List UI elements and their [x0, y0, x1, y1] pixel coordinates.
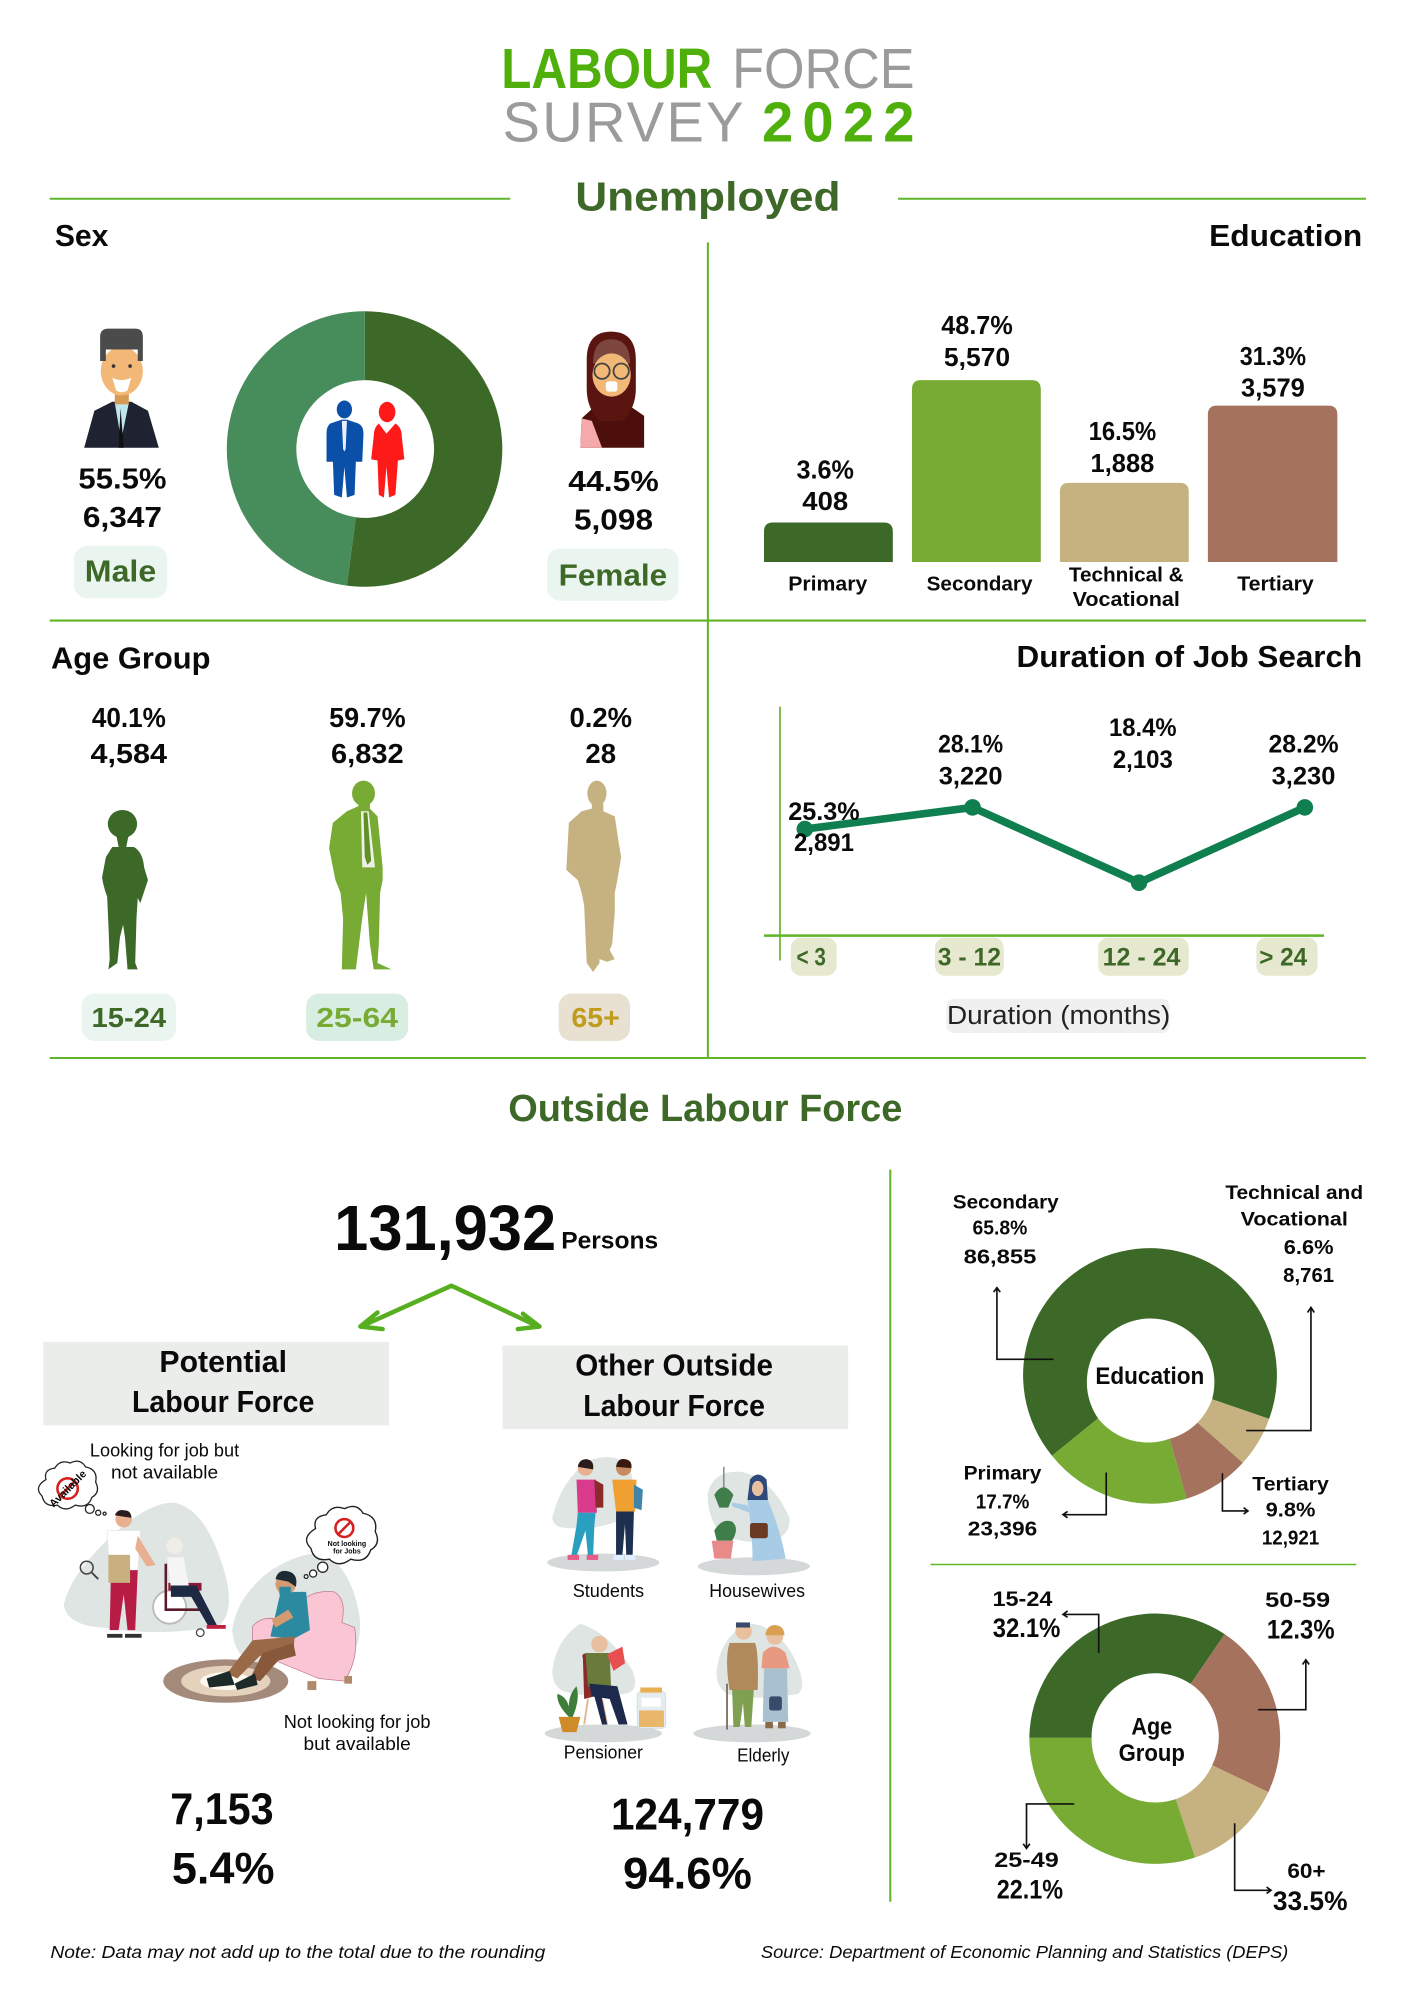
- callout: 15-24: 15-24: [992, 1586, 1052, 1611]
- donut chart: age group: Group: [1119, 1740, 1185, 1766]
- illustration: housewives: [698, 1467, 810, 1575]
- figures: potential labour force: [170, 1785, 275, 1893]
- heading: Outside Labour Force: Outside Labour Force: [508, 1087, 902, 1130]
- callout: 60+: [1235, 1823, 1348, 1916]
- callout: Primary: 17.7%: [976, 1491, 1029, 1513]
- bar: Technical and Vocational: 1,888: [1091, 450, 1154, 478]
- line chart: [764, 707, 1324, 960]
- title: [501, 37, 915, 154]
- thought bubble: not looking for jobs: [304, 1506, 377, 1578]
- callout: Tertiary: Tertiary: [1252, 1474, 1329, 1496]
- illustration: man on sofa: [163, 1553, 360, 1703]
- bar: Technical and Vocational: [1060, 418, 1189, 611]
- total persons: 131,932: [334, 1192, 556, 1264]
- caption: looking for job: [90, 1439, 239, 1482]
- panel: other outside labour force: [503, 1346, 848, 1899]
- callout: 50-59: 50-59: [1265, 1587, 1330, 1612]
- data label: over 24 months: 28.2%: [1268, 731, 1339, 759]
- thought bubble: available: Available: [47, 1468, 89, 1510]
- figures: potential labour force: 5.4%: [172, 1844, 275, 1893]
- total persons: Persons: [561, 1228, 658, 1255]
- donut chart: education: Education: [1095, 1363, 1204, 1389]
- heading: Age Group: Age Group: [51, 641, 210, 675]
- axis pill: under 3: < 3: [797, 944, 826, 972]
- data label: 3-12 months: 28.1%: [938, 731, 1003, 759]
- illustration: elderly: [693, 1622, 811, 1742]
- group: 15-24: 4,584: [91, 738, 168, 769]
- figures: other outside labour force: 94.6%: [623, 1850, 752, 1899]
- bar: Tertiary: [1208, 343, 1337, 596]
- label: male share: 55.5%: [78, 464, 166, 496]
- group: 15-24: 40.1%: [92, 702, 166, 733]
- panel: duration of job search: [764, 640, 1362, 1033]
- bar: Tertiary: Tertiary: [1237, 574, 1314, 596]
- callout: 60+: 33.5%: [1273, 1886, 1348, 1916]
- data label: over 24 months: 3,230: [1272, 762, 1335, 790]
- caption: looking for job: not available: [111, 1461, 218, 1482]
- illustration: pensioner: [545, 1624, 666, 1742]
- callout: Secondary: [953, 1191, 1059, 1359]
- group: 65+: [559, 702, 632, 1041]
- donut chart: sex: [227, 311, 502, 587]
- callout: Technical and Vocational: 6.6%: [1284, 1237, 1334, 1259]
- panel: outside labour force age donut: [992, 1586, 1348, 1916]
- group: 65+: 28: [585, 738, 616, 769]
- axis title: Duration (months): [947, 1002, 1170, 1030]
- panel: outside labour force education donut: [953, 1182, 1363, 1550]
- title: 2022: [762, 91, 914, 154]
- caption: Students: Students: [573, 1580, 644, 1601]
- group: 15-24: [82, 702, 176, 1041]
- donut chart: age group: [1029, 1614, 1280, 1864]
- callout: Primary: 23,396: [968, 1519, 1037, 1541]
- group: 25-64: 59.7%: [329, 702, 406, 733]
- callout: 15-24: [992, 1586, 1099, 1653]
- title: SURVEY: [503, 91, 744, 154]
- callout: Technical and Vocational: 8,761: [1283, 1265, 1334, 1287]
- caption: not looking for job: but available: [304, 1733, 411, 1754]
- heading box: Other Outside Labour Force: Labour Force: [583, 1389, 765, 1423]
- bar: Primary: Primary: [788, 574, 868, 596]
- data label: under 3 months: [788, 798, 860, 857]
- bar: Primary: 408: [802, 488, 848, 516]
- group: 15-24: 15-24: [92, 1002, 167, 1033]
- callout: 15-24: 32.1%: [993, 1613, 1060, 1643]
- caption: Elderly: Elderly: [737, 1744, 790, 1765]
- callout: Secondary: 65.8%: [973, 1218, 1027, 1240]
- axis pill: under 3: [791, 938, 837, 976]
- heading box: Potential Labour Force: [43, 1342, 389, 1425]
- axis pill: 3-12: [935, 938, 1004, 976]
- data label: under 3 months: 25.3%: [788, 798, 860, 826]
- bar: Tertiary: 3,579: [1241, 375, 1305, 403]
- group: 65+: 0.2%: [570, 702, 632, 733]
- heading box: Other Outside Labour Force: [503, 1346, 848, 1429]
- label: Male pill: Male: [85, 555, 156, 589]
- heading: Sex: Sex: [55, 219, 108, 253]
- panel: sex: [55, 219, 679, 601]
- callout: Tertiary: 12,921: [1262, 1528, 1319, 1550]
- heading: Education: Education: [1209, 219, 1362, 253]
- group: 25-64: 25-64: [316, 1002, 398, 1033]
- footnote: source: Source: Department of Economic Planning and Statistics (DEPS): [761, 1942, 1288, 1962]
- caption: not looking for job: [284, 1711, 430, 1754]
- callout: 25-49: [994, 1804, 1074, 1904]
- axis pill: 12-24: 12 - 24: [1103, 944, 1181, 972]
- callout: Secondary: 86,855: [964, 1247, 1036, 1269]
- figures: other outside labour force: 124,779: [611, 1791, 764, 1840]
- heading box: Other Outside Labour Force: Other Outside: [575, 1349, 773, 1383]
- bar: Technical and Vocational: 16.5%: [1089, 418, 1156, 446]
- callout: Tertiary: [1222, 1473, 1329, 1550]
- heading: Duration of Job Search: Duration of Job Search: [1017, 640, 1362, 674]
- figures: potential labour force: 7,153: [170, 1785, 274, 1834]
- group: 65+: 65+: [571, 1002, 620, 1033]
- panel: age group: [51, 641, 632, 1041]
- data label: 3-12 months: 3,220: [939, 762, 1003, 790]
- title: FORCE: [732, 37, 915, 100]
- data label: 12-24 months: [1109, 714, 1177, 774]
- callout: Technical and Vocational: Vocational: [1241, 1208, 1348, 1230]
- thought bubble: available: [38, 1461, 106, 1515]
- label: Female pill: [547, 548, 679, 601]
- illustration: caregiver and wheelchair: [64, 1503, 229, 1638]
- label: Female pill: Female: [559, 558, 667, 592]
- data label: 3-12 months: [938, 731, 1003, 790]
- icon: woman avatar: [580, 332, 644, 448]
- label: Male pill: [74, 546, 167, 598]
- bar: Primary: 3.6%: [797, 456, 854, 484]
- axis pill: over 24: [1256, 938, 1318, 976]
- label: male share: 6,347: [83, 502, 162, 534]
- label: female share: [568, 466, 659, 536]
- callout: 60+: 60+: [1287, 1858, 1326, 1883]
- bar: Technical and Vocational: Technical &: [1069, 565, 1184, 587]
- caption: not looking for job: Not looking for job: [284, 1711, 430, 1732]
- axis pill: 12-24: [1098, 938, 1189, 976]
- bar: Secondary: [912, 312, 1041, 596]
- caption: Housewives: Housewives: [709, 1580, 805, 1601]
- callout: Secondary: Secondary: [953, 1191, 1059, 1213]
- donut chart: age group: Age: [1131, 1713, 1172, 1739]
- data label: over 24 months: [1268, 731, 1339, 790]
- label: male share: [78, 464, 166, 534]
- caption: looking for job: Looking for job but: [90, 1439, 239, 1460]
- callout: Primary: [964, 1463, 1106, 1541]
- bar: Tertiary: 31.3%: [1240, 343, 1306, 371]
- bar: Secondary: Secondary: [927, 574, 1033, 596]
- data label: 12-24 months: 18.4%: [1109, 714, 1177, 742]
- arrow: split into two groups: [360, 1286, 540, 1329]
- bar: Technical and Vocational: Vocational: [1073, 589, 1180, 611]
- group: 25-64: [306, 702, 408, 1041]
- callout: Primary: Primary: [964, 1463, 1041, 1485]
- callout: Technical and Vocational: Technical and: [1225, 1182, 1363, 1204]
- callout: 50-59: 12.3%: [1267, 1614, 1335, 1644]
- heading box: Potential Labour Force: Potential: [159, 1345, 287, 1379]
- data label: 12-24 months: 2,103: [1113, 746, 1173, 774]
- thought bubble: not looking for jobs: for Jobs: [333, 1549, 361, 1556]
- axis pill: over 24: > 24: [1259, 944, 1307, 972]
- axis pill: 3-12: 3 - 12: [938, 944, 1001, 972]
- callout: 25-49: 22.1%: [997, 1874, 1063, 1904]
- bar: Primary: [764, 456, 893, 596]
- callout: Tertiary: 9.8%: [1266, 1500, 1315, 1522]
- label: female share: 44.5%: [568, 466, 659, 498]
- callout: 50-59: [1258, 1587, 1335, 1710]
- group: 25-64: 6,832: [331, 738, 404, 769]
- panel: education: [764, 219, 1362, 611]
- donut chart: education: [1023, 1248, 1277, 1504]
- data label: under 3 months: 2,891: [794, 829, 854, 857]
- heading: Unemployed: Unemployed: [575, 173, 841, 219]
- figures: other outside labour force: [611, 1791, 764, 1899]
- bar: Secondary: 48.7%: [941, 312, 1013, 340]
- illustration: students: [547, 1457, 659, 1571]
- caption: Pensioner: Pensioner: [564, 1741, 643, 1762]
- footnote: note: Note: Data may not add up to the total due to the rounding: [50, 1942, 545, 1962]
- icon: man and woman: [327, 401, 404, 497]
- label: female share: 5,098: [574, 504, 653, 536]
- bar: Secondary: 5,570: [944, 344, 1010, 372]
- heading box: Potential Labour Force: Labour Force: [132, 1385, 314, 1419]
- panel: potential labour force: [38, 1342, 430, 1893]
- callout: Technical and Vocational: [1225, 1182, 1363, 1431]
- title: LABOUR: [501, 37, 712, 100]
- icon: man avatar: [84, 329, 159, 448]
- callout: 25-49: 25-49: [994, 1847, 1059, 1872]
- thought bubble: not looking for jobs: Not looking: [328, 1541, 366, 1548]
